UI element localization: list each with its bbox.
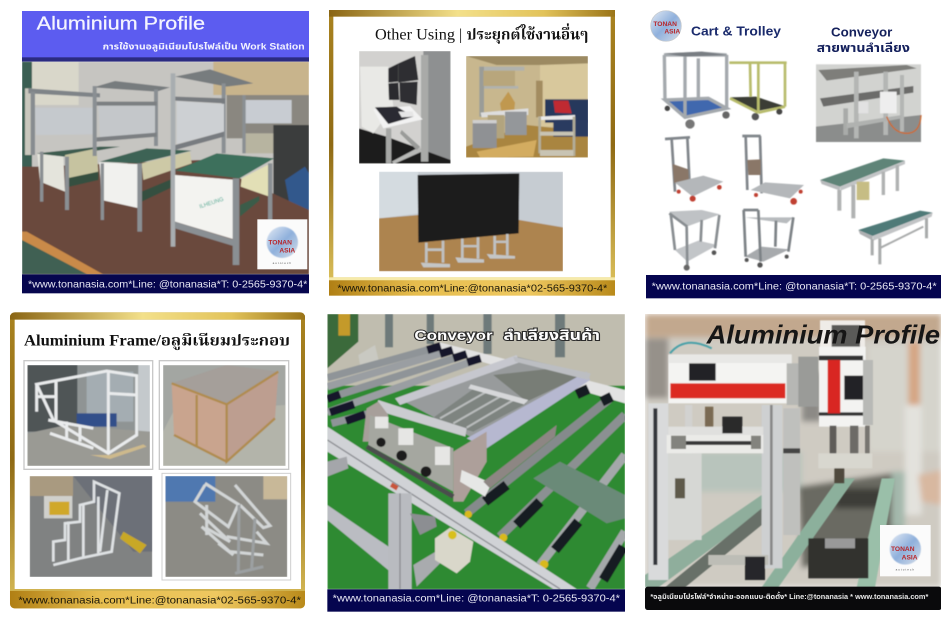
heading: Other Using: ประยุกต์ใช้งานอื่นๆ [467, 22, 588, 45]
footer: contact strip [327, 589, 625, 612]
footer: contact strip: *www.tonanasia.com*Line: @tonanasia*T: 0-2565-9370-4* [333, 593, 620, 604]
heading: Conveyor: ลำเลียงสินค้า [503, 327, 600, 343]
heading: Other Using: Other Using | [375, 26, 462, 43]
front beams and post [327, 427, 577, 589]
illustration: belt conveyors [820, 158, 933, 264]
photo: conveyor machine [816, 64, 921, 142]
panel: aluminium frame [10, 312, 305, 608]
photo: panelled box frame [163, 365, 286, 466]
photo frame outline B [159, 361, 289, 469]
photo: monitor work station [359, 51, 451, 164]
logo: Tonan Asia badge: TONAN [268, 239, 292, 246]
logo: Tonan Asia badge: autotech [896, 567, 915, 571]
photo: shelving room [466, 56, 588, 158]
logo: Tonan Asia badge: ASIA [902, 554, 918, 561]
photo: three aluminium work stations: ILHEUNG [199, 197, 225, 210]
logo: Tonan Asia badge [257, 219, 307, 269]
photo: video wall stand [379, 172, 563, 271]
photo frame outline D [162, 473, 291, 580]
central lift frame [406, 356, 564, 437]
footer: contact strip: *www.tonanasia.com*Line: @tonanasia*T: 0-2565-9370-4* [28, 279, 307, 290]
logo: Tonan Asia globe: TONAN [653, 21, 677, 28]
heading: Conveyor: สายพานลำเลียง [817, 41, 910, 55]
panel: cart, trolley and conveyor [646, 11, 941, 298]
footer: contact strip: *อลูมิเนียมโปรไฟล์*จำหน่าย-ออกแบบ-ติดตั้ง* Line:@tonanasia * www.tonanasia.com* [650, 591, 929, 601]
lower right rollers [467, 398, 625, 588]
panel: roller conveyor [327, 314, 625, 612]
panel: other using [329, 10, 615, 296]
heading: Aluminium Frame: Aluminium Frame/อลูมิเนียมประกอบ [24, 332, 290, 351]
logo: Tonan Asia badge: autotech [273, 261, 292, 265]
photo: three aluminium work stations [22, 62, 309, 275]
footer: contact strip: *www.tonanasia.com*Line:@tonanasia*02-565-9370-4* [337, 284, 607, 295]
back station [25, 88, 32, 155]
gold frame [329, 10, 615, 281]
footer: contact strip [645, 587, 941, 610]
photo: aluminium step frame [30, 476, 152, 577]
photo: angled rack frame [165, 476, 287, 577]
upper left rollers [327, 348, 473, 423]
heading: Conveyor: Conveyor [414, 327, 493, 343]
logo: Tonan Asia globe: ASIA [664, 28, 680, 35]
heading band: Aluminium Profile: การใช้งานอลูมิเนียมโปรไฟล์เป็น Work Station [103, 42, 305, 52]
illustration: two-tier carts [669, 210, 793, 271]
footer: contact strip [646, 275, 941, 298]
heading band: Aluminium Profile [22, 11, 309, 62]
footer: contact strip: *www.tonanasia.com*Line:@tonanasia*02-565-9370-4* [18, 595, 301, 606]
glass panel [533, 462, 625, 523]
heading: Conveyor [414, 327, 600, 343]
gold frame [10, 312, 305, 608]
heading band: Aluminium Profile: Aluminium Profile [37, 12, 205, 33]
heading: Other Using [375, 22, 588, 45]
illustration: blue and yellow carts [664, 52, 787, 129]
photo: production line machine [645, 314, 941, 587]
footer: contact strip [329, 280, 615, 296]
photo: white frame structure [27, 365, 150, 466]
heading: Cart & Trolley: Cart & Trolley [691, 25, 781, 39]
footer: contact strip [10, 591, 305, 608]
middle station [93, 81, 170, 92]
heading: Aluminium Profile: Aluminium Profile [706, 319, 940, 349]
logo: Tonan Asia globe [651, 11, 681, 41]
photo frame outline A [24, 361, 153, 469]
front station [175, 69, 253, 87]
footer: contact strip [22, 274, 309, 293]
logo: Tonan Asia badge [880, 525, 931, 576]
illustration: platform trolleys [665, 136, 804, 205]
footer: contact strip: *www.tonanasia.com*Line: @tonanasia*T: 0-2565-9370-4* [652, 281, 937, 292]
panel: aluminium profile work station [22, 11, 309, 293]
logo: Tonan Asia badge: TONAN [891, 546, 915, 553]
photo: roller conveyor with lifting frame [327, 314, 625, 589]
heading: Conveyor [817, 25, 910, 55]
heading: Conveyor: Conveyor [831, 25, 892, 39]
panel: aluminium profile production line [645, 314, 941, 610]
logo: Tonan Asia badge: ASIA [279, 248, 295, 255]
